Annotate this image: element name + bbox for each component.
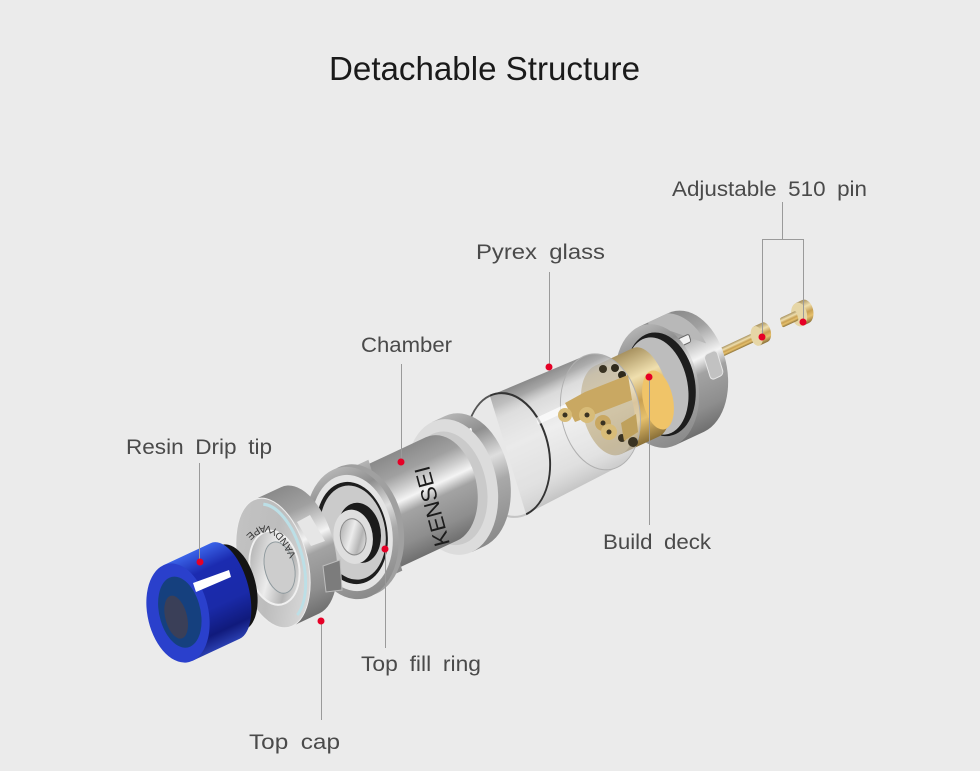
callout: Pyrex glass [476,241,605,370]
callout: Build deck: Build deck [603,531,712,554]
callout: Top fill ring: Top fill ring [361,653,481,676]
callout: Top cap [249,618,340,754]
callout: Top cap: Top cap [249,731,340,754]
product: chamber [343,397,526,582]
drip tip highlight [193,570,231,592]
callout: Resin Drip tip [126,436,272,566]
product: resin drip tip [135,530,269,674]
product: top cap [236,486,342,628]
callout: Pyrex glass: Pyrex glass [476,241,605,264]
product: top fill ring [290,447,419,616]
product: build deck body [571,339,679,465]
product: base ring [601,295,742,463]
product: build deck posts [558,364,638,447]
chamber logo: KENSEI [409,463,455,549]
callout: Adjustable 510 pin [672,178,867,340]
callout: Top fill ring [361,546,481,676]
callout: Build deck [603,374,712,554]
callout: Chamber [361,334,452,466]
cap notches [297,515,325,546]
cap engraving: VANDYVAPE [246,525,295,559]
product: adjustable 510 pin [713,297,816,365]
callout: Chamber: Chamber [361,334,452,357]
callout: Resin Drip tip: Resin Drip tip [126,436,272,459]
callout: Adjustable 510 pin: Adjustable 510 pin [672,178,867,201]
title: Detachable Structure [329,50,640,87]
product: pyrex glass [452,336,655,532]
